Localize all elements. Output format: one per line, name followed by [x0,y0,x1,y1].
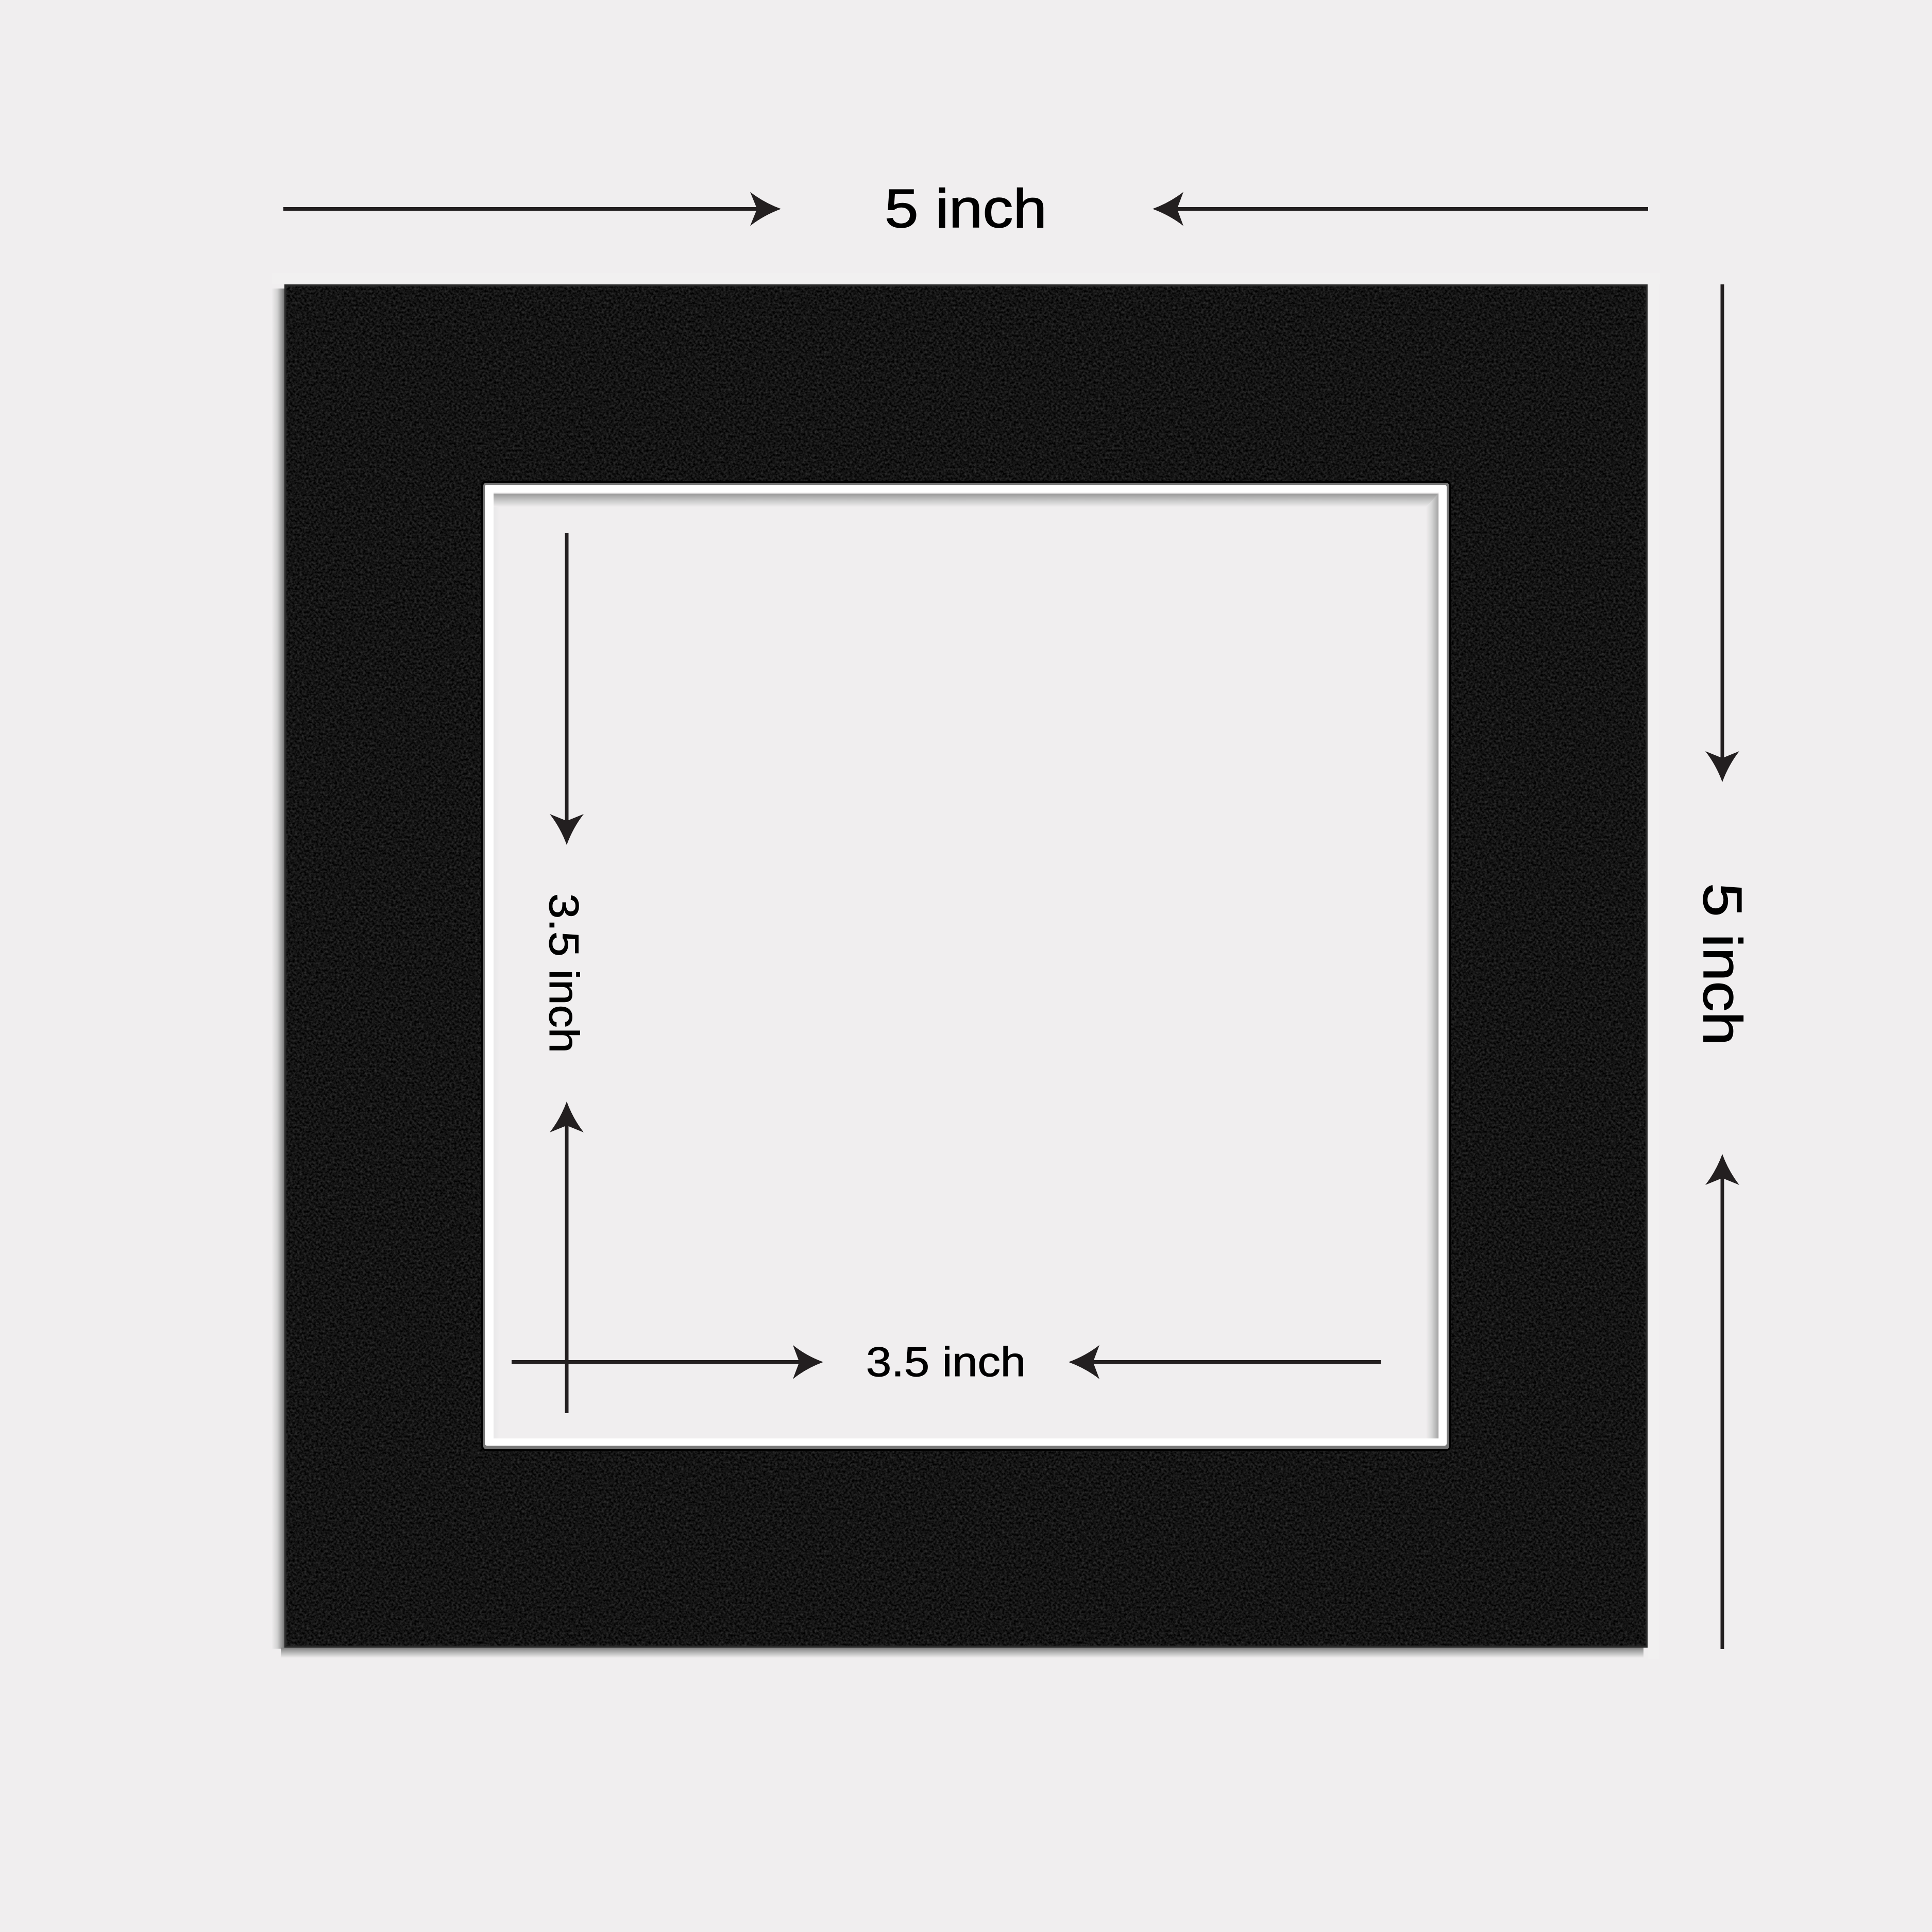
label: inner left 3.5 inch: 3.5 inch [540,893,587,1053]
label: right 5 inch: 5 inch [1692,883,1753,1045]
arrow: right height, pointing up [1705,1154,1739,1649]
arrow: top width, pointing right [283,192,781,226]
arrow: right height, pointing down [1705,284,1739,782]
arrow: inner width, pointing right [512,1345,823,1379]
arrow: inner width, pointing left [1069,1345,1381,1379]
arrow: top width, pointing left [1153,192,1648,226]
label: top 5 inch: 5 inch [885,178,1047,239]
mat drop shadow [272,273,1660,1659]
panel: black mat board [272,273,1660,1659]
arrow: inner height, pointing down [550,533,584,845]
label: inner bottom 3.5 inch: 3.5 inch [866,1339,1026,1385]
mat surface [284,284,1648,1648]
window opening with white core [481,481,1451,1451]
arrow: inner height, pointing up [550,1101,584,1413]
